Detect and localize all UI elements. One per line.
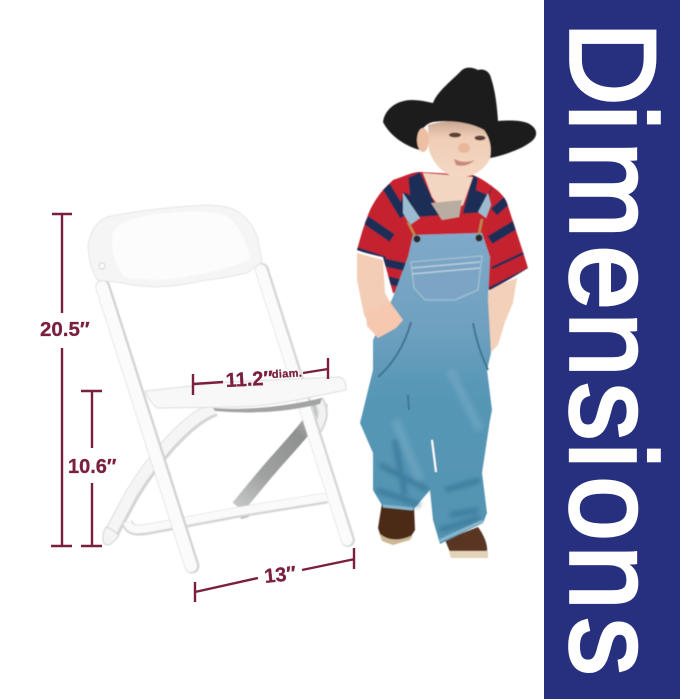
bib pocket [411, 256, 482, 300]
boy head [428, 121, 495, 177]
dimension: seat height 10.6 inches [68, 391, 117, 546]
chair left foot [103, 527, 119, 545]
chair crossed curved legs [110, 400, 322, 536]
chair front leg [102, 287, 192, 566]
dimension: width 13 inches [195, 548, 355, 602]
boy shirt [355, 172, 530, 293]
boy left hand [366, 302, 403, 338]
boy neck and collar [423, 173, 473, 214]
dimension: seat 11.2 inches diameter [193, 358, 328, 395]
boy left arm [357, 253, 402, 337]
boy cowboy hat [383, 68, 536, 158]
chair seat [145, 377, 346, 412]
boy ear [417, 128, 429, 152]
dimension: width 13 inches: 13″ [263, 563, 298, 588]
dimension: seat 11.2 inches diameter: 11.2″ [225, 368, 274, 392]
heading: Dimensions: Dimensions [544, 22, 681, 675]
overall straps [403, 193, 491, 225]
dimension: seat 11.2 inches diameter: diam. [272, 367, 302, 381]
photo: folding kids chair [88, 205, 348, 566]
chair crossbar [127, 497, 327, 530]
panel: Dimensions banner [544, 0, 681, 699]
chair backrest [88, 205, 262, 287]
boy right arm [478, 278, 517, 356]
chair back leg [261, 270, 348, 540]
dimension: height 20.5 inches: 20.5″ [40, 318, 90, 341]
boy shoes [378, 503, 488, 558]
boy overalls [360, 193, 492, 544]
photo: boy in cowboy hat and overalls [355, 68, 536, 558]
overall seams and folds [378, 322, 488, 410]
dimension: height 20.5 inches [40, 214, 90, 546]
dimension: seat height 10.6 inches: 10.6″ [68, 456, 117, 478]
